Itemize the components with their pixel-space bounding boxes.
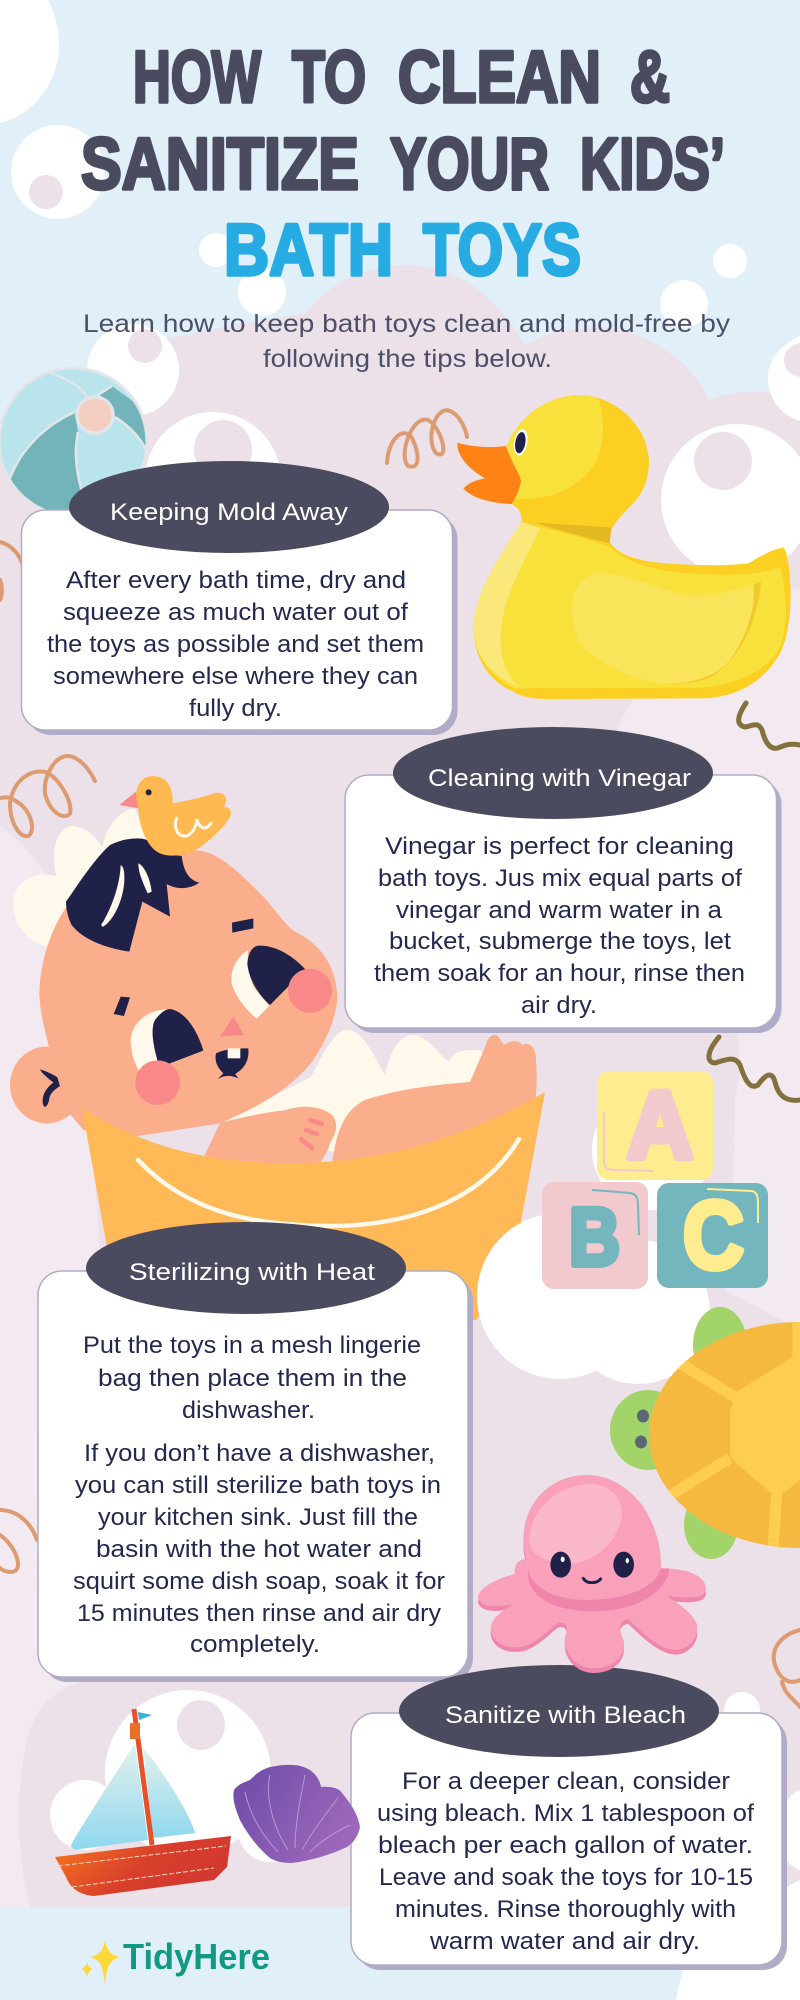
panel: sterilizing with heat bbox=[38, 1222, 473, 1682]
squiggle: orange curl by duck bbox=[387, 410, 467, 467]
sail bbox=[71, 1743, 148, 1850]
heading pill bbox=[399, 1665, 719, 1757]
heading pill bbox=[69, 461, 389, 553]
foam behind right bbox=[224, 1030, 540, 1170]
nose bbox=[220, 1017, 244, 1037]
title: TOYS bbox=[423, 210, 581, 291]
heading: Sterilizing with Heat bbox=[129, 1259, 375, 1286]
ear bbox=[10, 1047, 83, 1123]
logo: tidyhere bbox=[81, 1936, 270, 1985]
duckling on head bbox=[119, 776, 231, 856]
panel: cleaning with vinegar bbox=[345, 727, 782, 1033]
title: CLEAN bbox=[398, 37, 601, 118]
hair bbox=[66, 838, 199, 952]
body text: them soak for an hour, rinse then bbox=[374, 960, 745, 987]
body text: fully dry. bbox=[189, 695, 282, 722]
bottom right bubble bbox=[676, 1880, 800, 2000]
illustration: baby in bucket bbox=[0, 756, 545, 1320]
body text: If you don’t have a dishwasher, bbox=[84, 1440, 435, 1467]
body text: For a deeper clean, consider bbox=[402, 1768, 730, 1795]
block a bbox=[597, 1071, 713, 1180]
orange curl by baby bbox=[0, 756, 95, 836]
subtitle bbox=[83, 310, 731, 373]
head bbox=[39, 850, 337, 1137]
icon: rubber duck bbox=[457, 395, 791, 699]
footer band bbox=[0, 1907, 690, 2000]
body text: somewhere else where they can bbox=[53, 663, 418, 690]
flag bbox=[138, 1712, 152, 1720]
body text: vinegar and warm water in a bbox=[396, 897, 723, 924]
body text: 15 minutes then rinse and air dry bbox=[77, 1600, 441, 1627]
body text bbox=[73, 1332, 445, 1658]
squiggle: brown lower right bbox=[709, 1037, 800, 1100]
body text: bucket, submerge the toys, let bbox=[389, 928, 731, 955]
block c bbox=[657, 1182, 768, 1289]
title bbox=[81, 37, 725, 291]
body text: you can still sterilize bath toys in bbox=[75, 1472, 441, 1499]
title: YOUR bbox=[390, 124, 549, 205]
title: KIDS’ bbox=[580, 124, 725, 205]
block b: B bbox=[569, 1192, 620, 1283]
squiggle: left orange curls bbox=[0, 542, 800, 1707]
foam behind left bbox=[13, 808, 147, 947]
body text: Vinegar is perfect for cleaning bbox=[385, 833, 734, 860]
baby head group bbox=[10, 776, 337, 1137]
icon: beach ball bbox=[0, 368, 150, 520]
bucket bbox=[82, 1092, 545, 1320]
wordmark: TidyHere bbox=[123, 1936, 270, 1977]
block b bbox=[542, 1182, 648, 1289]
icon: abc blocks bbox=[542, 1071, 768, 1289]
body text: warm water and air dry. bbox=[429, 1928, 700, 1955]
title: BATH bbox=[224, 210, 393, 291]
title: & bbox=[630, 37, 670, 118]
body text: squeeze as much water out of bbox=[63, 599, 408, 626]
heading: Cleaning with Vinegar bbox=[428, 765, 691, 792]
body text: completely. bbox=[190, 1631, 320, 1658]
block a: A bbox=[627, 1072, 693, 1179]
panel: keeping mold away bbox=[22, 461, 458, 735]
foam cloud behind blocks bbox=[477, 1213, 710, 1384]
heading pill bbox=[86, 1222, 406, 1314]
body text: your kitchen sink. Just fill the bbox=[98, 1504, 418, 1531]
body text: Leave and soak the toys for 10-15 bbox=[379, 1864, 753, 1891]
body text: bag then place them in the bbox=[98, 1365, 407, 1392]
leg and foot bbox=[332, 1035, 537, 1170]
body text: Put the toys in a mesh lingerie bbox=[83, 1332, 421, 1359]
body text bbox=[377, 1768, 754, 1955]
body text: using bleach. Mix 1 tablespoon of bbox=[377, 1800, 754, 1827]
heading pill bbox=[393, 727, 713, 819]
hand bbox=[200, 1107, 336, 1165]
title: HOW bbox=[133, 37, 261, 118]
block c: C bbox=[683, 1182, 744, 1289]
hull bbox=[55, 1836, 231, 1896]
body text: basin with the hot water and bbox=[96, 1536, 422, 1563]
body text: the toys as possible and set them bbox=[47, 631, 424, 658]
title: TO bbox=[292, 37, 366, 118]
subtitle: Learn how to keep bath toys clean and mold-free by bbox=[83, 310, 731, 338]
heading: Sanitize with Bleach bbox=[445, 1702, 686, 1729]
icon: turtle bbox=[610, 1307, 800, 1559]
mast bbox=[134, 1709, 152, 1845]
body text bbox=[47, 567, 424, 722]
body text: squirt some dish soap, soak it for bbox=[73, 1568, 445, 1595]
body text: air dry. bbox=[521, 992, 597, 1019]
body text: minutes. Rinse thoroughly with bbox=[395, 1896, 736, 1923]
icon: sparkles bbox=[81, 1940, 120, 1985]
title: SANITIZE bbox=[81, 124, 359, 205]
eyebrows bbox=[114, 918, 253, 1016]
mouth bbox=[215, 1048, 248, 1079]
icon: purple seashell bbox=[233, 1765, 360, 1863]
upper eye bbox=[231, 950, 269, 1019]
panel: sanitize with bleach bbox=[351, 1665, 787, 1970]
subtitle: following the tips below. bbox=[263, 345, 552, 373]
icon: octopus bbox=[478, 1475, 706, 1673]
body text: bleach per each gallon of water. bbox=[378, 1832, 753, 1859]
squiggle: brown right bbox=[739, 703, 800, 748]
body text: bath toys. Jus mix equal parts of bbox=[378, 865, 742, 892]
heading: Keeping Mold Away bbox=[110, 499, 348, 526]
lower eye bbox=[131, 1009, 167, 1075]
body text: dishwasher. bbox=[182, 1397, 315, 1424]
icon: toy sailboat bbox=[55, 1709, 231, 1896]
body text: After every bath time, dry and bbox=[66, 567, 406, 594]
body text bbox=[374, 833, 745, 1019]
